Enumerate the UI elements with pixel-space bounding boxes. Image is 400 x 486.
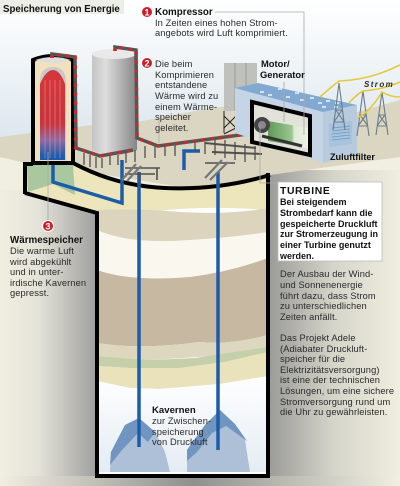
turbine box: einer Turbine genutzt <box>280 240 371 250</box>
label: Kavernen <box>152 405 211 447</box>
turbine box: Bei steigendem <box>280 197 347 207</box>
callout 3: Wärmespeicher: gepresst. <box>10 288 49 298</box>
text: Projekt Adele: Elektrizitätsversorgung) <box>280 365 380 375</box>
callout 2: Wärme: geleitet. <box>155 123 188 133</box>
callout 1: Kompressor <box>142 6 288 38</box>
callout 2: Wärme: Komprimieren <box>155 70 214 80</box>
text: Ausbau: Zeiten anfällt. <box>280 312 337 322</box>
surface supports <box>84 140 262 185</box>
title <box>0 0 124 15</box>
text: Projekt Adele: Stromversorgung rund um <box>280 397 390 407</box>
power pylons and lines <box>320 65 400 136</box>
text: Projekt Adele: (Adiabater Druckluft- <box>280 344 367 354</box>
motor generator <box>254 117 308 148</box>
callout 3: Wärmespeicher: irdische Kavernen <box>10 278 86 288</box>
text: Projekt Adele: ist eine der technischen <box>280 375 380 385</box>
text: Projekt Adele <box>280 333 394 417</box>
label: Motor/Generator <box>260 58 305 80</box>
underground strata <box>25 163 268 476</box>
shaft frame <box>25 163 270 476</box>
grey building behind <box>224 63 257 134</box>
label: Motor/Generator: Motor/ <box>261 58 290 69</box>
ground surface <box>0 100 400 190</box>
callout 1: Kompressor: In Zeiten eines hohen Strom- <box>155 18 278 28</box>
turbine box <box>278 182 382 261</box>
caverns <box>110 410 250 472</box>
text: Projekt Adele: Das Projekt Adele <box>280 333 356 343</box>
label: Kavernen: zur Zwischen- <box>152 416 211 426</box>
callout 2: Wärme: einem Wärme- <box>155 102 217 112</box>
heat storage tower <box>33 56 73 163</box>
callout 1: Kompressor: 1 <box>144 8 150 18</box>
text: Ausbau: führt dazu, dass Strom <box>280 291 376 301</box>
turbine box: zur Stromerzeugung in <box>280 229 378 239</box>
callout 3: Wärmespeicher: wird abgekühlt <box>9 257 72 267</box>
leader lines <box>48 12 304 220</box>
turbine box: Strombedarf kann die <box>280 208 373 218</box>
label: Kavernen: speicherung <box>152 427 204 437</box>
callout 3: Wärmespeicher: 3 <box>45 222 51 232</box>
label: Motor/Generator: Generator <box>260 69 305 80</box>
air storage cylinder <box>92 49 137 155</box>
callout 3: Wärmespeicher <box>9 220 86 298</box>
text: Ausbau: und Sonnenenergie <box>280 280 363 290</box>
callout 1: Kompressor: Kompressor <box>155 7 213 18</box>
turbine box: werden. <box>279 251 314 261</box>
callout 2: Wärme: entstandene <box>155 80 207 90</box>
label: Zuluftfilter: Zuluftfilter <box>330 152 375 162</box>
label: Kavernen: von Druckluft <box>152 437 208 447</box>
turbine box: TURBINE <box>280 186 330 197</box>
callout 2: Wärme: Wärme wird zu <box>155 91 218 101</box>
callout 3: Wärmespeicher: Die warme Luft <box>10 246 74 256</box>
text: Projekt Adele: Lösungen, um eine sichere <box>280 386 394 396</box>
turbine hall <box>235 83 357 163</box>
label: Strom: Strom <box>364 80 394 89</box>
green heat storage base <box>27 165 75 195</box>
machine hall window <box>252 102 310 155</box>
callout 2: Wärme <box>142 58 218 133</box>
icon: air filter <box>329 121 352 147</box>
text: Projekt Adele: speicher für die <box>280 354 345 364</box>
callout 1: Kompressor: angebots wird Luft komprimiert. <box>155 28 288 38</box>
red hot-air pipe <box>52 47 255 156</box>
callout 2: Wärme: 2 <box>144 58 150 68</box>
blue air pipes <box>53 151 218 450</box>
text: Ausbau <box>280 269 376 322</box>
callout 2: Wärme: speicher <box>155 112 191 122</box>
label: Kavernen: Kavernen <box>152 405 196 416</box>
callout 2: Wärme: Die beim <box>155 59 193 69</box>
text: Ausbau: zu unterschiedlichen <box>280 301 367 311</box>
turbine box: gespeicherte Druckluft <box>280 219 378 229</box>
callout 3: Wärmespeicher: und in unter- <box>10 267 64 277</box>
callout 3: Wärmespeicher: Wärmespeicher <box>10 235 83 246</box>
title: Speicherung von Energie <box>3 4 120 15</box>
text: Projekt Adele: die Uhr zu gewährleisten. <box>280 407 387 417</box>
text: Ausbau: Der Ausbau der Wind- <box>280 269 373 279</box>
